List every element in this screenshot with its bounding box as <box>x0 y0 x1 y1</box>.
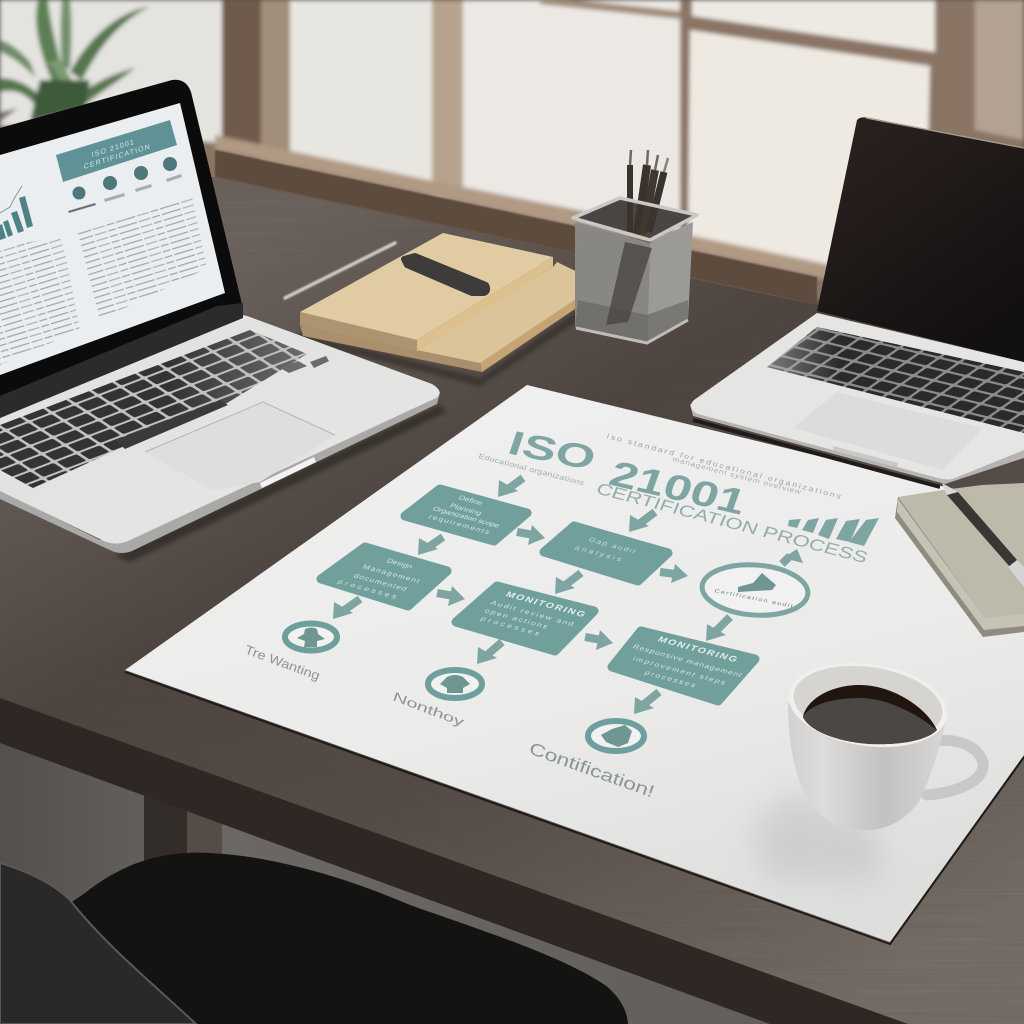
trackpad edge <box>145 402 335 452</box>
box: step 1: Organization scope <box>431 505 502 529</box>
subtitle: left: Educational organizations <box>477 452 585 487</box>
right laptop screen <box>817 117 1024 362</box>
label: training: Tre Wanting <box>243 642 322 683</box>
cup shadow <box>750 790 880 880</box>
chair: centre <box>60 853 628 1024</box>
box: step 1: Planning <box>448 502 484 517</box>
box: step 5 monitoring: MONITORING <box>655 635 739 664</box>
box: step 2 <box>321 547 447 606</box>
box: step 4 monitoring: open actions <box>483 607 550 630</box>
poster sheet <box>125 385 1024 942</box>
lower notebook side <box>480 283 600 372</box>
arrow keys <box>280 356 329 373</box>
coffee surface <box>803 698 937 744</box>
laptop shadow <box>115 405 446 562</box>
subtitle: top right: Iso standard for educational organizations <box>605 432 842 501</box>
notebook shadow <box>296 292 610 386</box>
holder back <box>573 198 697 240</box>
mesh pencil holder <box>573 150 697 343</box>
arrow: right 2 <box>437 586 465 606</box>
arrow: down 6 <box>555 573 581 594</box>
upper notebook front <box>300 312 417 351</box>
notebook cover <box>300 233 553 340</box>
right laptop <box>690 117 1024 487</box>
notebook pages <box>897 499 1024 630</box>
label: monitoring: Nonthoy <box>391 689 466 729</box>
icon: certification ring <box>588 721 644 751</box>
clip <box>404 256 487 293</box>
holder left face <box>575 222 650 343</box>
plant leaves <box>0 0 150 122</box>
box: step 5 monitoring: improvement steps <box>631 655 728 686</box>
box: step 3 <box>544 526 668 581</box>
box: step 2: Management <box>361 563 423 585</box>
coffee cup <box>750 653 983 880</box>
desk leg <box>144 790 222 865</box>
screen display <box>0 103 225 375</box>
paper shadow line <box>125 672 1024 944</box>
screen bar chart <box>0 196 33 240</box>
arrow: down 1 <box>498 478 523 497</box>
screen bezel <box>0 80 243 408</box>
cup inner wall <box>789 657 947 751</box>
window pane: far left <box>0 0 222 143</box>
box: step 4 monitoring: processes <box>479 615 542 637</box>
box: step 5 monitoring <box>612 631 755 701</box>
icon: training ring <box>285 624 337 650</box>
background: window and wall <box>0 0 1024 300</box>
holder rim <box>573 198 697 240</box>
frame: light post <box>261 0 291 170</box>
icon: large house ring <box>700 561 810 619</box>
box: step 2: documented <box>352 572 409 593</box>
right laptop deck <box>691 313 1024 480</box>
laptop base deck <box>0 315 440 544</box>
holder right face <box>647 222 693 343</box>
front notch <box>260 457 316 488</box>
floor under desk <box>0 740 780 1024</box>
box: step 1 <box>405 489 527 541</box>
arrows <box>333 478 803 714</box>
notebook side <box>895 497 1024 637</box>
right laptop underside <box>690 404 1024 484</box>
space bar <box>115 400 228 449</box>
arrow: right 4 <box>660 564 688 583</box>
arrow: down 8 <box>634 692 659 714</box>
notebooks: tan <box>296 233 610 386</box>
window pane: far right <box>975 0 1024 140</box>
title: 21001: 21001 <box>604 454 752 523</box>
pencil on desk <box>285 243 395 298</box>
coffee dark edge <box>803 685 937 744</box>
box: step 5 monitoring: Responsive management <box>631 643 745 679</box>
arrow: down 5 <box>629 512 655 532</box>
box: step 3: analysis <box>573 544 624 563</box>
box: step 2: processes <box>336 578 399 600</box>
right trackpad <box>793 392 983 470</box>
screen text right column <box>78 197 207 320</box>
lower notebook front <box>300 325 482 372</box>
keyboard light fade <box>0 330 307 488</box>
right front notch <box>833 446 898 467</box>
window top bar <box>540 0 680 15</box>
pencils <box>630 150 668 234</box>
screen text left column <box>0 236 80 365</box>
window pane: centre <box>463 0 680 231</box>
box: step 4 monitoring: MONITORING <box>503 590 587 619</box>
wood grain <box>888 1014 890 1015</box>
holder lower shade <box>575 300 688 343</box>
arrow: down 2 <box>418 537 443 555</box>
lower notebook cover <box>417 262 600 363</box>
right keyboard light fade <box>767 327 1024 433</box>
laptop base underside <box>0 392 440 553</box>
screen icon captions <box>68 174 182 213</box>
arrow: right 3 <box>585 630 613 650</box>
desk front edge <box>0 695 912 1024</box>
screen header band: ISO 21001 <box>91 138 134 159</box>
arrow: down 3 <box>333 599 360 619</box>
right laptop shadow on paper <box>693 420 940 487</box>
box: step 5 monitoring: processes <box>643 669 698 689</box>
arrow: down 4 <box>477 642 502 664</box>
window pane: right lower <box>688 30 930 285</box>
window sill light band <box>215 135 925 300</box>
arrow: up <box>782 549 803 564</box>
title: certification process: CERTIFICATION PROCESS <box>593 480 870 567</box>
title: ISO: ISO <box>504 424 601 477</box>
pencils inside holder <box>606 242 652 325</box>
bar chart icon <box>788 518 879 546</box>
icon: large house ring: Certification audit <box>713 588 794 609</box>
arrow: down 7 <box>706 617 730 641</box>
screen header band: CERTIFICATION <box>83 143 150 171</box>
trackpad <box>145 402 335 490</box>
cup handle <box>927 740 983 795</box>
hinge band <box>0 303 243 418</box>
right screen top edge <box>866 118 1024 148</box>
cup body <box>788 703 947 830</box>
subtitle: second line: management system overview <box>671 455 803 496</box>
screen header band <box>56 120 177 182</box>
notebook cover <box>898 483 1024 618</box>
frame: centre mullion <box>431 0 464 200</box>
box: step 2: Design <box>385 557 415 570</box>
arrow: right 1 <box>517 525 545 545</box>
box: step 4 monitoring: Audit review and <box>489 599 576 628</box>
box: step 1: requirements <box>427 513 492 536</box>
pen <box>942 483 1024 587</box>
holder base rim <box>576 320 688 343</box>
keyboard <box>0 330 307 488</box>
box: step 1: Define <box>457 494 485 507</box>
left laptop <box>0 80 446 562</box>
label: certification: Contification! <box>527 738 657 801</box>
icon: monitoring ring <box>428 670 482 698</box>
cup rim <box>783 653 953 757</box>
frame: dark post <box>219 0 261 170</box>
chair: left <box>0 863 196 1024</box>
screen trend line <box>0 186 22 213</box>
box: step 3: Gap audit <box>587 536 639 555</box>
window pane: right upper <box>692 0 935 52</box>
notebook with pen <box>895 483 1024 637</box>
window pane: left <box>290 0 432 181</box>
poster: ISO 21001 certification process <box>125 385 1024 942</box>
box: step 4 monitoring <box>456 586 594 651</box>
right keyboard <box>767 327 1024 433</box>
rear desk sill <box>215 150 817 305</box>
screen contents <box>0 120 207 365</box>
upper notebook side <box>417 257 553 351</box>
screen icons <box>72 157 177 200</box>
